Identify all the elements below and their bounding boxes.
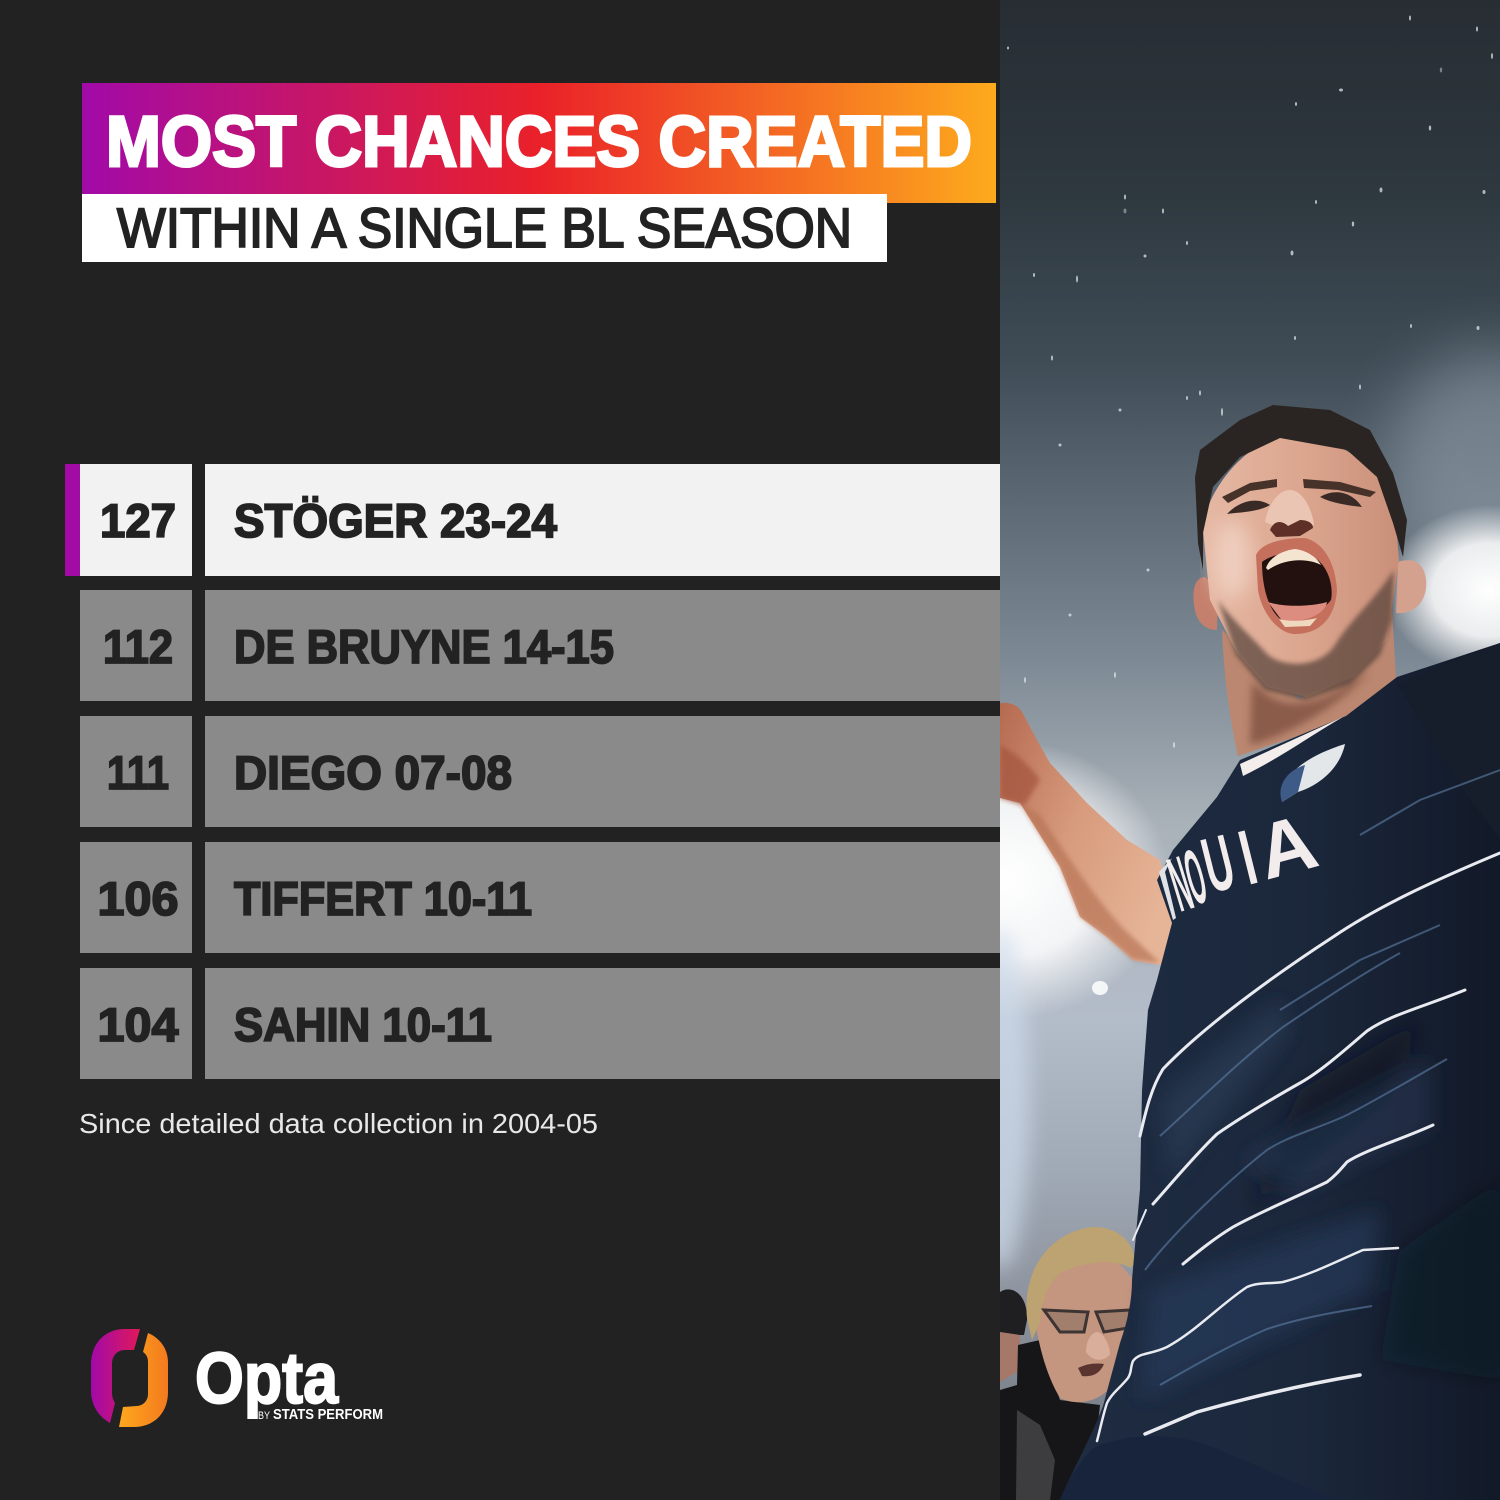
row 1: Stöger: STÖGER 23-24 (234, 494, 557, 547)
beard (1218, 570, 1394, 700)
faint stripes (1145, 770, 1500, 1385)
jersey sponsor: O (1176, 834, 1215, 922)
old man in background (1000, 1227, 1135, 1500)
tagline: STATS PERFORM (273, 1407, 383, 1423)
mouth (1262, 553, 1332, 622)
hair (1026, 1227, 1135, 1340)
lips (1256, 538, 1337, 634)
second spectator (1000, 1289, 1027, 1335)
right sleeve shading (1496, 643, 1500, 644)
jersey stripes (1097, 853, 1500, 1441)
row 3: Diego: DIEGO 07-08 (234, 746, 512, 799)
photo sky with stadium lights (1000, 0, 1500, 1417)
jersey sponsor: N (1160, 841, 1201, 929)
jersey sponsor: I (1231, 814, 1265, 901)
row 5: Sahin: SAHIN 10-11 (234, 998, 492, 1051)
jersey sponsor: A (1248, 797, 1326, 896)
photo: celebrating player (1000, 0, 1500, 1500)
face (1032, 1257, 1134, 1402)
row 3: Diego (80, 716, 1000, 827)
icon: Opta ring (91, 1329, 168, 1427)
row 4: Tiffert (80, 842, 1000, 953)
ear right (1396, 560, 1426, 613)
sleeve trim (1159, 858, 1176, 920)
arm and fist (1000, 703, 1180, 965)
ear left (1193, 577, 1218, 630)
row 1: Stöger (65, 464, 1000, 576)
collar (1240, 717, 1343, 776)
wordmark: Opta (195, 1339, 339, 1419)
hair (1195, 405, 1407, 570)
jersey sponsor: U (1194, 819, 1243, 910)
face (1203, 436, 1399, 697)
Opta logo (91, 1329, 383, 1427)
ranking table (65, 464, 1000, 1079)
footnote: Since detailed data collection in 2004-05 (79, 1108, 598, 1139)
club badge (1280, 744, 1345, 802)
shorts waistband (1060, 1446, 1098, 1500)
jersey (1060, 643, 1500, 1500)
row 5: Sahin (80, 968, 1000, 1079)
row 2: De Bruyne: DE BRUYNE 14-15 (234, 620, 614, 673)
lower teeth (1279, 618, 1317, 627)
row 1: Stöger: 127 (100, 494, 176, 547)
jersey sponsor (1166, 819, 1320, 912)
title bar (82, 83, 996, 203)
jacket (1000, 1340, 1100, 1500)
upper teeth (1266, 549, 1321, 570)
glasses (1044, 1310, 1130, 1332)
eyebrows (1222, 479, 1376, 503)
row 3: Diego: 111 (107, 746, 169, 799)
subtitle bar: WITHIN A SINGLE BL SEASON (117, 196, 852, 259)
row 5: Sahin: 104 (98, 998, 178, 1051)
row 4: Tiffert: TIFFERT 10-11 (234, 872, 532, 925)
title bar: MOST CHANCES CREATED (106, 103, 972, 182)
cheek highlight (1212, 520, 1252, 600)
nose (1265, 490, 1314, 528)
neck (1222, 610, 1396, 756)
row 2: De Bruyne: 112 (103, 620, 173, 673)
head (1193, 405, 1426, 700)
row 4: Tiffert: 106 (98, 872, 178, 925)
tongue (1268, 602, 1327, 622)
row 2: De Bruyne (80, 590, 1000, 701)
jersey folds (1141, 1009, 1431, 1393)
nose and mouth (1086, 1332, 1110, 1360)
eyes (1227, 492, 1362, 514)
tagline: BY (258, 1410, 271, 1422)
